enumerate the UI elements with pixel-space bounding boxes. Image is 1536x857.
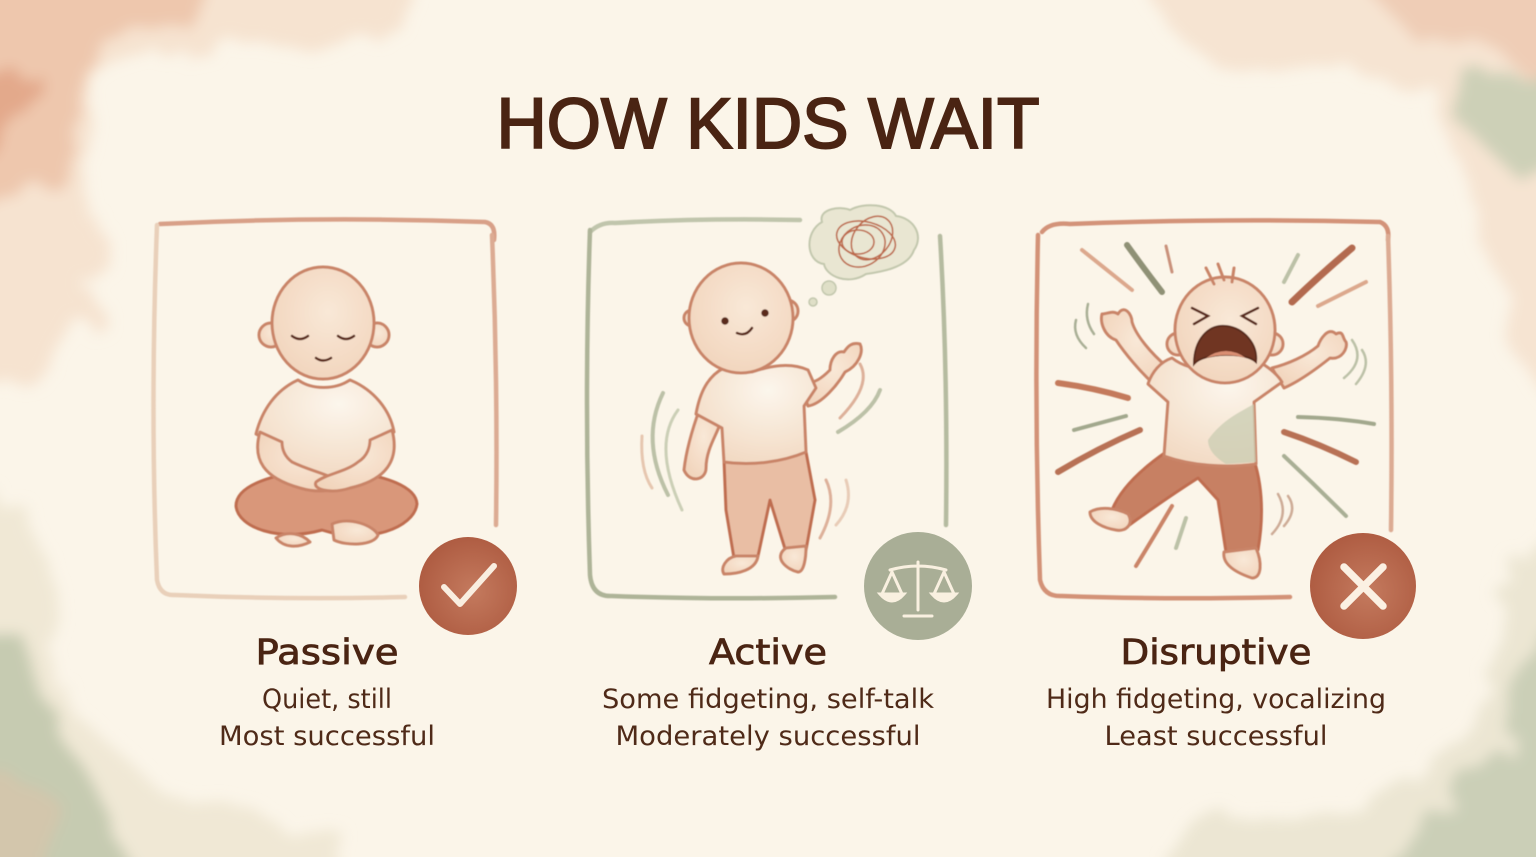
description: disruptive (1046, 684, 1386, 752)
heading: active: Active (709, 633, 827, 673)
arms (258, 432, 340, 491)
legs crossed (236, 472, 417, 536)
frame: disruptive (1036, 220, 1392, 598)
heading: passive: Passive (256, 633, 398, 673)
panel: disruptive (1036, 220, 1416, 752)
description: active: Moderately successful (616, 721, 920, 752)
ear right (1261, 333, 1283, 355)
feet (723, 556, 758, 574)
description: disruptive: Least successful (1104, 721, 1328, 752)
child: passive, meditating (236, 267, 417, 546)
t-shirt (696, 366, 816, 464)
description: active: Some fidgeting, self-talk (602, 684, 934, 715)
badge: cross (1310, 533, 1416, 639)
head (689, 263, 793, 373)
motion lines left (642, 364, 880, 538)
foot right (1224, 548, 1260, 578)
crying face (1192, 308, 1258, 364)
badge: check (419, 537, 517, 635)
description: passive: Most successful (219, 721, 435, 752)
title: HOW KIDS WAIT (496, 85, 1040, 164)
face (722, 310, 768, 334)
t-shirt (256, 380, 394, 476)
frame: passive (154, 219, 496, 598)
shirt stain (1208, 404, 1256, 464)
foot left (1090, 508, 1130, 530)
description: passive: Quiet, still (262, 684, 392, 715)
watercolor wash: top left (0, 0, 430, 380)
heading: disruptive: Disruptive (1120, 633, 1312, 673)
ear (776, 300, 798, 322)
right arm (315, 430, 394, 491)
frame: active (587, 219, 946, 598)
left arm (684, 408, 720, 479)
right arm (798, 343, 861, 406)
face (292, 336, 354, 360)
ear left (1167, 333, 1189, 355)
description: passive (219, 684, 435, 752)
foot left (276, 534, 310, 546)
description: disruptive: High fidgeting, vocalizing (1046, 684, 1386, 715)
watercolor wash: bottom right (1180, 520, 1536, 857)
thought bubble (809, 205, 918, 306)
hair (1206, 264, 1234, 284)
head (1175, 277, 1275, 383)
child: active, fidgeting (642, 263, 880, 574)
ear left (684, 310, 700, 326)
ear right (365, 323, 389, 347)
panel: passive (154, 219, 517, 752)
pants (724, 452, 815, 558)
ears (259, 323, 283, 347)
head (272, 267, 374, 379)
watercolor wash: bottom left (0, 500, 360, 857)
burst lines (1058, 245, 1374, 566)
t-shirt (1148, 358, 1282, 466)
watercolor wash: top right (1130, 0, 1536, 440)
badge: scales (864, 532, 972, 640)
panel: active (587, 205, 972, 752)
right foot (781, 546, 806, 572)
foot (332, 521, 378, 544)
child: disruptive, tantrum (1090, 264, 1346, 578)
pants (1112, 452, 1261, 552)
arm right (1272, 332, 1346, 388)
arm left (1102, 310, 1166, 386)
description: active (602, 684, 934, 752)
